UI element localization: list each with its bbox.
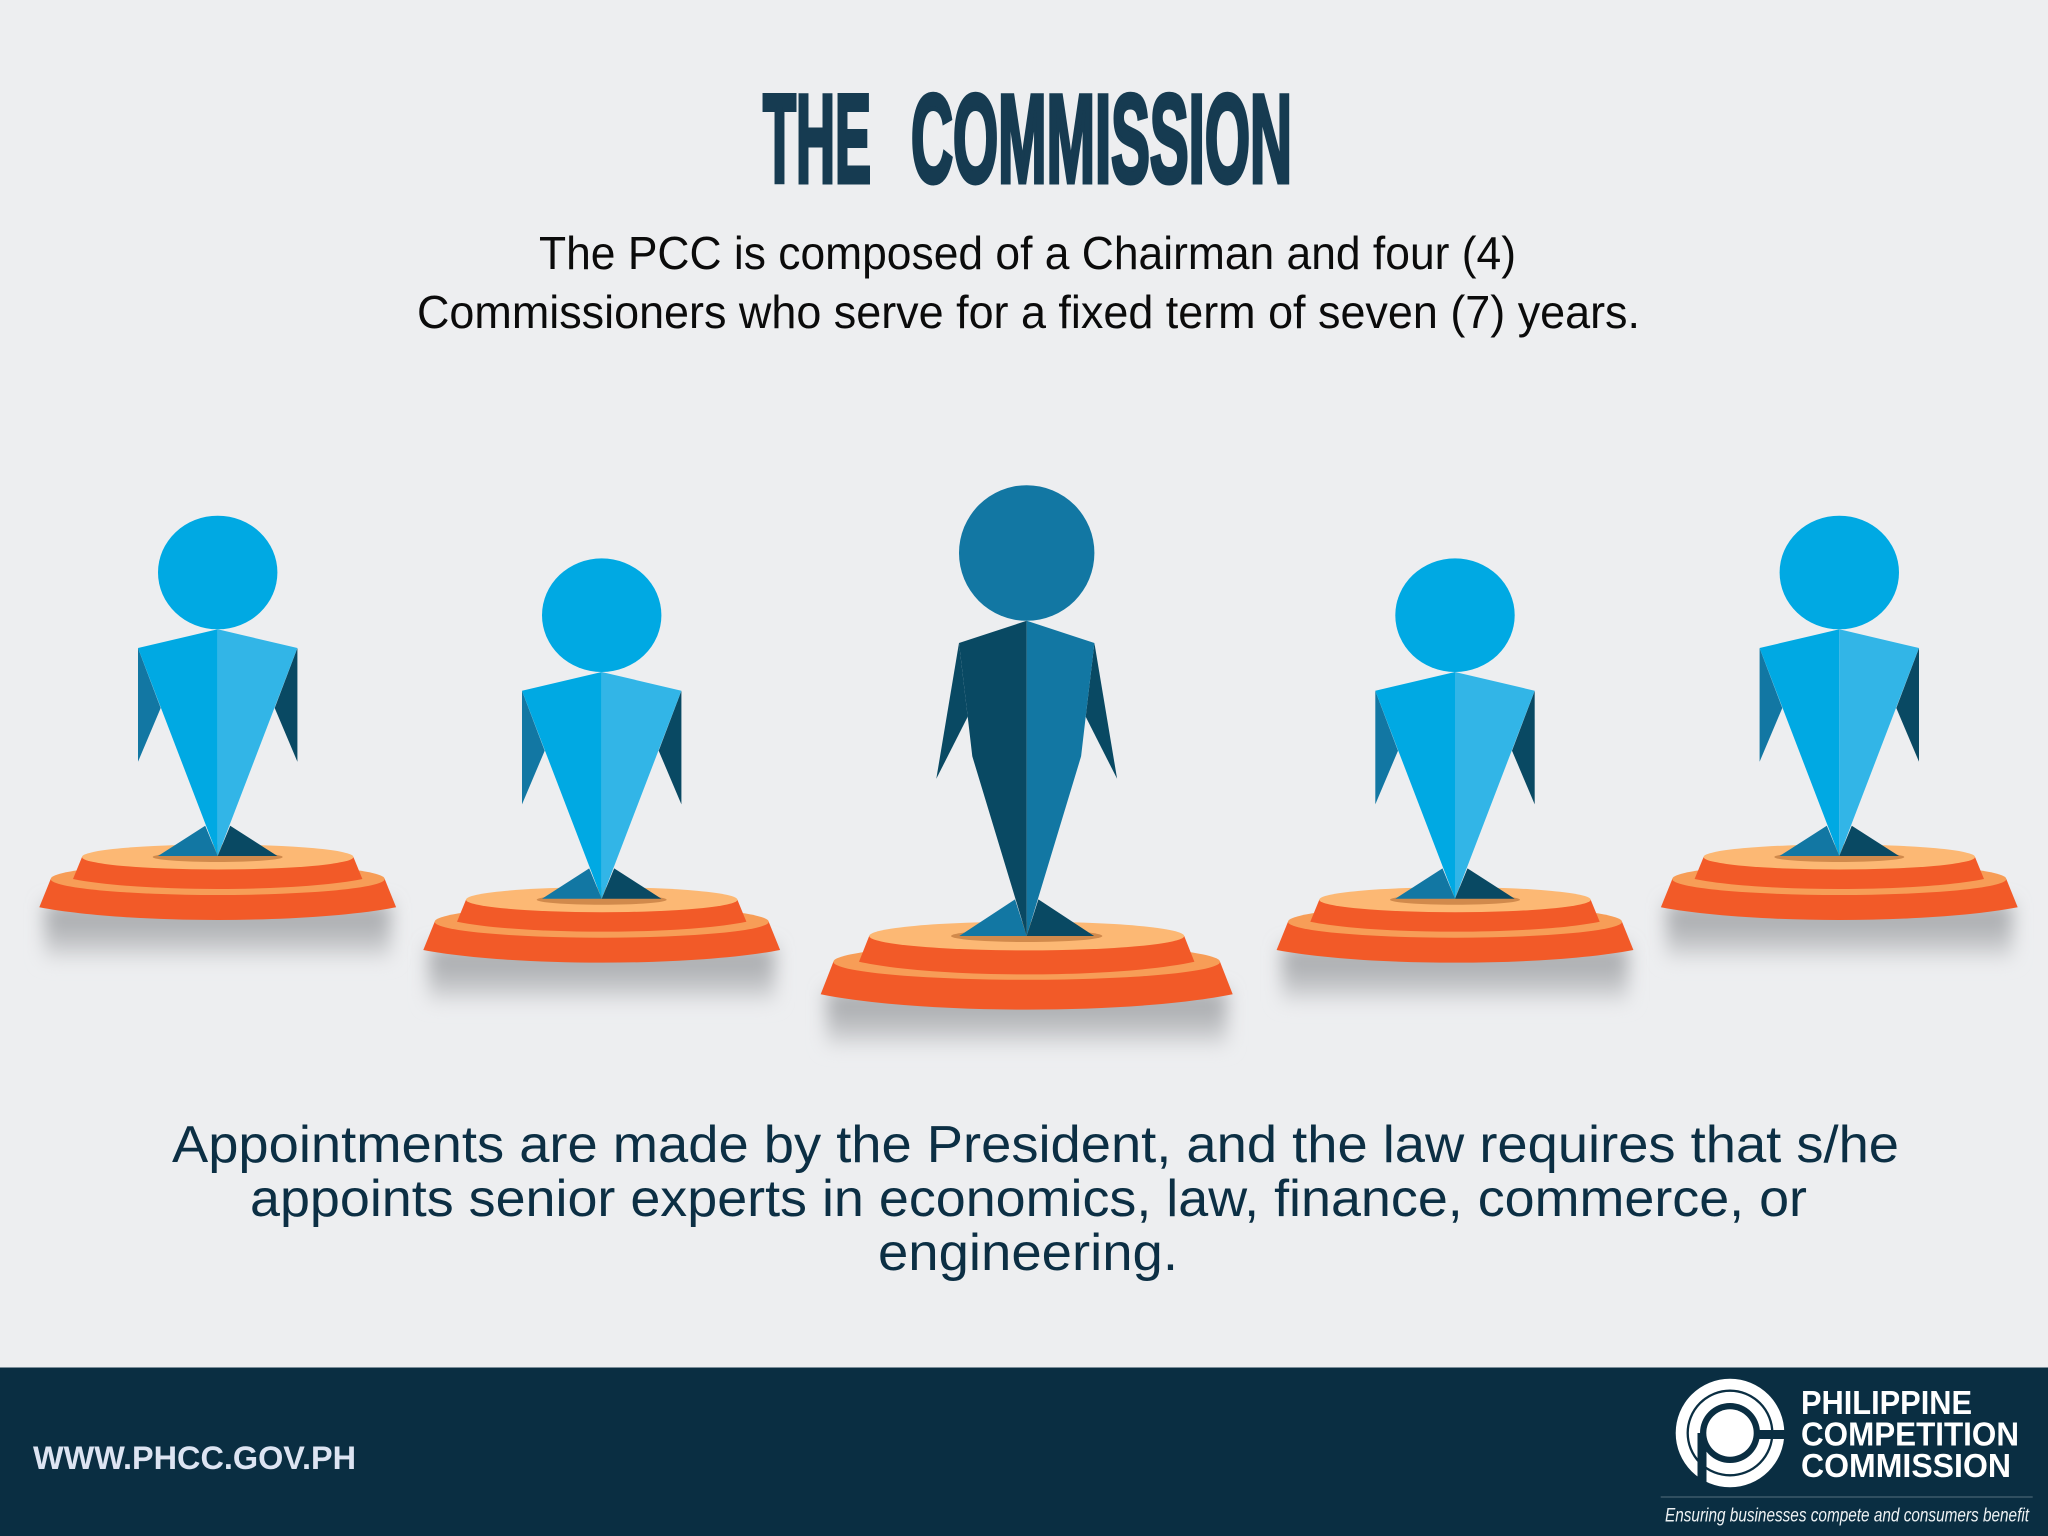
appointments text: Appointments are made by the President, and the law requires that s/he	[172, 1116, 1899, 1174]
figure: commissioner 1 on podium	[39, 516, 396, 959]
title: THE	[763, 70, 871, 209]
intro text: The PCC is composed of a Chairman and four (4)	[539, 227, 1516, 279]
figure: commissioner 3 on podium	[1277, 558, 1633, 1002]
title	[763, 70, 1292, 209]
figure: commissioner 2 on podium	[423, 558, 780, 1002]
intro text	[417, 227, 1640, 338]
footer band	[0, 1368, 2048, 1536]
organisation name: COMMISSION	[1801, 1447, 2011, 1484]
organisation name	[1801, 1384, 2019, 1484]
intro text: Commissioners who serve for a fixed term of seven (7) years.	[417, 286, 1640, 338]
appointments text: appoints senior experts in economics, law, finance, commerce, or	[250, 1170, 1807, 1228]
figure: chairman on podium	[821, 485, 1233, 1046]
figure: commissioner 4 on podium	[1661, 516, 2018, 959]
infographic canvas: COMMISSION	[911, 70, 1292, 209]
appointments text	[172, 1116, 1899, 1282]
organisation name: COMPETITION	[1801, 1416, 2019, 1452]
icon: PCC logo mark	[1676, 1379, 1790, 1491]
appointments text: engineering.	[878, 1224, 1178, 1282]
website url: WWW.PHCC.GOV.PH	[33, 1440, 356, 1476]
organisation name: PHILIPPINE	[1801, 1384, 1972, 1421]
